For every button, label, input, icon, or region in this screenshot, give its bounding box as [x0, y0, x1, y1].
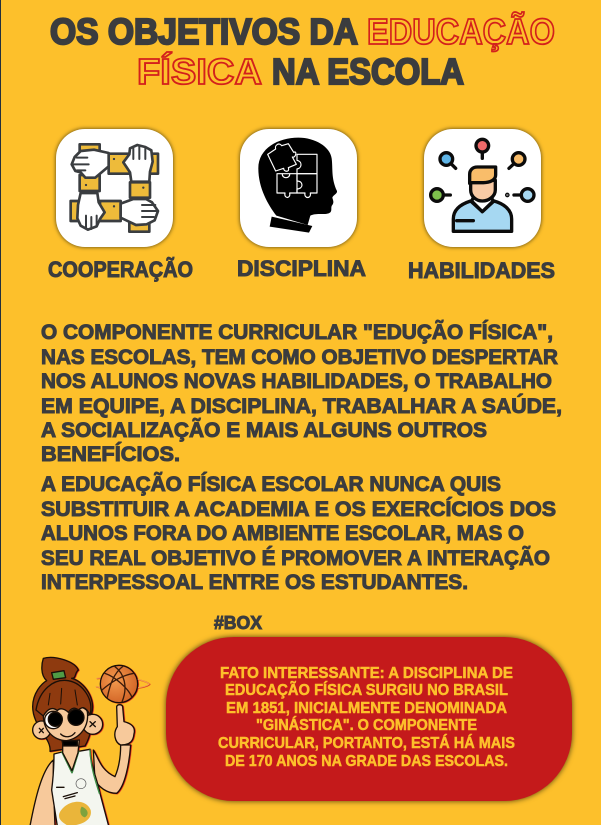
label: habilidades: HABILIDADES [408, 258, 555, 283]
callout: fato interessante: FATO INTERESSANTE: A DISCIPLINA DE [220, 665, 513, 682]
text block: second paragraph: ALUNOS FORA DO AMBIENTE ESCOLAR, MAS O [41, 522, 524, 545]
label: disciplina: DISCIPLINA [237, 256, 366, 281]
ear marks [39, 722, 95, 733]
hand: bottom right [121, 199, 158, 225]
hand: top left [72, 150, 109, 178]
text block: second paragraph [41, 473, 556, 594]
bangs [36, 680, 91, 716]
face [43, 705, 88, 741]
ears [33, 721, 51, 739]
text block: first paragraph: NAS ESCOLAS, TEM COMO OBJETIVO DESPERTAR [41, 346, 558, 369]
text block: second paragraph: INTERPESSOAL ENTRE OS ESTUDANTES. [41, 571, 468, 594]
mouth [61, 733, 75, 737]
hand: top right [123, 145, 153, 182]
title [50, 10, 555, 92]
callout: fato interessante: EM 1851, INICIALMENTE DENOMINADA [226, 700, 507, 717]
basketball [96, 665, 149, 703]
callout: fato interessante: EDUCAÇÃO FÍSICA SURGIU NO BRASIL [225, 681, 508, 699]
callout: fato interessante: CURRICULAR, PORTANTO, ESTÁ HÁ MAIS [218, 735, 515, 752]
hair band [52, 671, 66, 679]
text block: second paragraph: A EDUCAÇÃO FÍSICA ESCOLAR NUNCA QUIS [41, 473, 501, 496]
right arm and hand [93, 745, 131, 793]
title: OS OBJETIVOS DA [50, 11, 358, 52]
text block: first paragraph: EM EQUIPE, A DISCIPLINA, TRABALHAR A SAÚDE, [41, 394, 562, 418]
text block: first paragraph: A SOCIALIZAÇÃO E MAIS ALGUNS OUTROS [41, 419, 487, 442]
text block: first paragraph: BENEFÍCIOS. [41, 443, 180, 466]
illustration: girl spinning a basketball [30, 657, 149, 825]
jersey [52, 749, 109, 825]
puzzle: loose piece [268, 144, 296, 171]
callout: fato interessante: "GINÁSTICA". O COMPONENTE [256, 717, 477, 734]
title: EDUCAÇÃO [367, 10, 555, 52]
icon card: disciplina [240, 129, 357, 247]
person [453, 201, 512, 231]
text block: second paragraph: SUBSTITUIR A ACADEMIA E OS EXERCÍCIOS DOS [41, 498, 556, 521]
cuff dots [85, 158, 144, 207]
text block: first paragraph: NOS ALUNOS NOVAS HABILIDADES, O TRABALHO [41, 370, 552, 393]
hair back [33, 657, 93, 751]
callout: fato interessante: DE 170 ANOS NA GRADE DAS ESCOLAS. [225, 753, 508, 770]
eyes [45, 711, 62, 729]
heading: #box: #BOX [214, 613, 262, 633]
text block: first paragraph [41, 321, 562, 466]
icon card: habilidades [424, 129, 541, 247]
title: FÍSICA [137, 51, 262, 92]
text block: second paragraph: SEU REAL OBJETIVO É PROMOVER A INTERAÇÃO [41, 547, 550, 570]
text block: first paragraph: O COMPONENTE CURRICULAR "EDUÇÃO FÍSICA", [41, 321, 553, 344]
neck [63, 740, 79, 771]
callout: fato interessante [166, 637, 572, 801]
jersey print [59, 802, 91, 825]
label: cooperação: COOPERAÇÃO [48, 257, 193, 282]
puzzle: assembled pieces [297, 154, 317, 174]
left arm [30, 760, 55, 825]
hand: bottom left [77, 193, 105, 230]
icon card: cooperação [56, 129, 173, 247]
title: NA ESCOLA [272, 51, 464, 92]
